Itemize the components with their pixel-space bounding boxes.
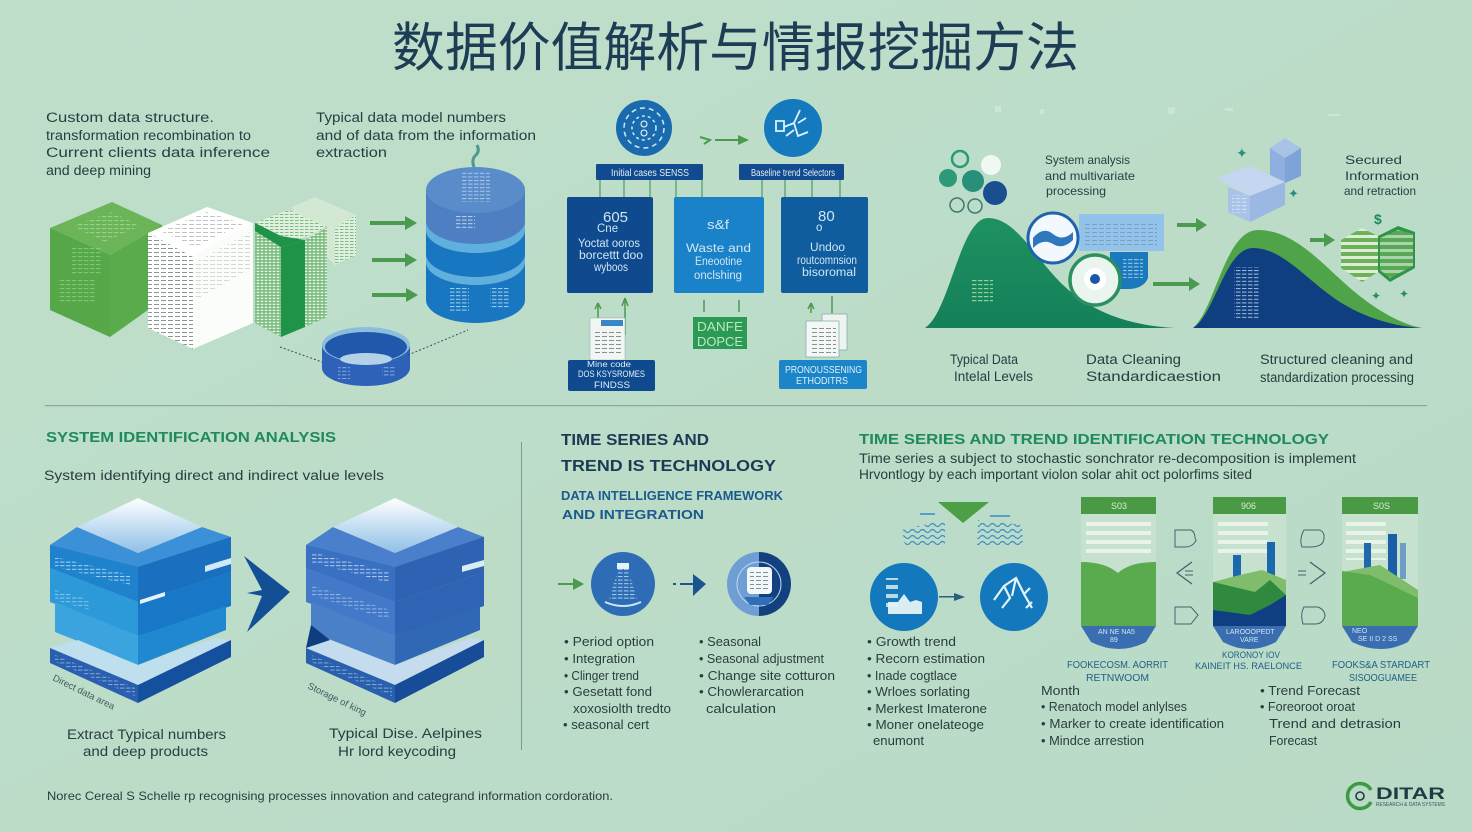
icon: document circle bbox=[727, 552, 791, 616]
text: system analysis: processing bbox=[1046, 184, 1106, 198]
green label: danfe dopce: DANFE bbox=[697, 319, 743, 334]
heading: time series and trend bbox=[561, 432, 784, 522]
box one: Cne bbox=[597, 223, 618, 235]
text block: typical data model numbers: Typical data model numbers bbox=[316, 110, 506, 125]
text block: typical data model numbers bbox=[316, 110, 536, 160]
captions: top right: Standardicaestion bbox=[1086, 369, 1221, 384]
list: growth: enumont bbox=[873, 733, 924, 748]
box two: Waste and bbox=[686, 243, 751, 255]
text: system analysis: System analysis bbox=[1045, 153, 1130, 167]
arrow: small dark bbox=[939, 593, 965, 601]
text block: custom data structure bbox=[46, 110, 270, 178]
card: area chart three: S0S bbox=[1373, 501, 1390, 511]
icon: isometric server: ✦ bbox=[1236, 145, 1248, 161]
box one: borcettt doo bbox=[579, 250, 643, 262]
slanted small labels bbox=[51, 673, 368, 719]
captions: lower left bbox=[67, 726, 482, 759]
white table bbox=[148, 207, 253, 349]
text block: typical data model numbers: and of data from the information bbox=[316, 128, 536, 143]
text: structured information: Information bbox=[1345, 169, 1419, 183]
heading: time series and trend: AND INTEGRATION bbox=[562, 507, 704, 522]
logo: RESEARCH & DATA SYSTEMS bbox=[1376, 802, 1445, 808]
text block: custom data structure: and deep mining bbox=[46, 163, 151, 178]
card labels: FOOKS&A STARDART bbox=[1332, 660, 1430, 671]
list: trend forecast: Forecast bbox=[1269, 733, 1317, 748]
list: middle column two bbox=[699, 634, 835, 716]
captions: top right: Intelal Levels bbox=[954, 369, 1033, 384]
arrows: right section bbox=[1153, 218, 1335, 291]
heading: time series trend technology: TIME SERIES AND TREND IDENTIFICATION TECHNOLOGY bbox=[859, 431, 1329, 448]
icon: dish bbox=[322, 327, 410, 386]
list: middle column two: • Seasonal adjustment bbox=[699, 651, 824, 666]
pale back table bbox=[292, 197, 356, 265]
text block: typical data model numbers: extraction bbox=[316, 145, 387, 160]
green label: danfe dopce bbox=[693, 317, 747, 349]
captions: top right: standardization processing bbox=[1260, 370, 1414, 385]
list: month: • Marker to create identification bbox=[1041, 716, 1224, 731]
heading: time series and trend: DATA INTELLIGENCE FRAMEWORK bbox=[561, 488, 784, 503]
divider: horizontal bbox=[45, 405, 1427, 406]
captions: lower left: Extract Typical numbers bbox=[67, 727, 226, 742]
description text: Time series a subject to stochastic sonchrator re-decomposition is implement bbox=[859, 451, 1356, 466]
captions: top right: Data Cleaning bbox=[1086, 352, 1181, 367]
list: trend forecast: Trend and detrasion bbox=[1269, 716, 1401, 731]
illustration: stacked layers one bbox=[50, 498, 231, 703]
icon: document one bbox=[590, 318, 625, 360]
card labels bbox=[1067, 650, 1430, 684]
list: growth: • Growth trend bbox=[867, 634, 956, 649]
divider: vertical bbox=[521, 442, 522, 750]
text: structured information bbox=[1344, 153, 1419, 198]
text block: custom data structure: Current clients data inference bbox=[46, 145, 270, 160]
logo: DITAR bbox=[1376, 784, 1445, 803]
box two: Eneootine bbox=[695, 256, 742, 268]
panel: blue data callouts bbox=[1028, 213, 1164, 305]
card: area chart two: VARE bbox=[1240, 637, 1259, 644]
green cube bbox=[50, 202, 162, 337]
label: bottom left: FINDSS bbox=[594, 380, 630, 390]
card: area chart two: LAROOOPEDT bbox=[1226, 629, 1275, 636]
logo bbox=[1348, 783, 1445, 808]
box one: 605 bbox=[603, 209, 628, 226]
captions: lower left: Typical Dise. Aelpines bbox=[329, 726, 482, 741]
icon: network circle bbox=[980, 563, 1048, 631]
list: middle column one: • seasonal cert bbox=[563, 717, 649, 732]
icon: tower circle bbox=[591, 552, 655, 616]
green label: danfe dopce: DOPCE bbox=[697, 334, 743, 349]
heading: system identification: SYSTEM IDENTIFICATION ANALYSIS bbox=[46, 430, 336, 446]
arrow: green to ship icon bbox=[558, 578, 584, 590]
text: system analysis bbox=[1045, 153, 1135, 198]
list: growth bbox=[867, 634, 987, 748]
box one: Yoctat ooros bbox=[578, 238, 640, 250]
captions: top right bbox=[950, 352, 1414, 385]
arrow: between circles bbox=[700, 135, 749, 145]
list: middle column two: • Change site cotturon bbox=[699, 668, 835, 683]
card labels: KORONOY IOV bbox=[1222, 650, 1280, 660]
flow diagram bbox=[567, 99, 868, 391]
box three: bisoromal bbox=[802, 267, 856, 279]
label: bottom left: DOS KSYSROMES bbox=[578, 369, 645, 379]
footer note: Norec Cereal S Schelle rp recognising processes innovation and categrand information cordoration. bbox=[47, 789, 613, 803]
description text: Hrvontlogy by each important violon solar ahit oct polorfims sited bbox=[859, 467, 1252, 482]
slanted small labels: Storage of king bbox=[306, 681, 368, 719]
box three: 80 bbox=[818, 208, 835, 225]
list: growth: • Moner onelateoge bbox=[867, 717, 984, 732]
box two: onclshing bbox=[694, 270, 742, 282]
list: middle column one: • Gesetatt fond bbox=[564, 684, 652, 699]
label bar two: Baseline trend Selectors bbox=[751, 168, 835, 179]
card labels: SISOOGUAMEE bbox=[1349, 673, 1417, 684]
list: middle column one: • Integration bbox=[564, 651, 635, 666]
icon: green stacked server: ✦ bbox=[1399, 287, 1409, 301]
connector ticks bbox=[600, 180, 840, 197]
illustration: data blocks bbox=[50, 197, 356, 349]
icon: green stacked server bbox=[1341, 211, 1415, 303]
list: middle column one: • Period option bbox=[564, 634, 654, 649]
card labels: KAINEIT HS. RAELONCE bbox=[1195, 661, 1302, 672]
text: system analysis: and multivariate bbox=[1045, 169, 1135, 183]
faint marks at top right bbox=[995, 106, 1340, 116]
card: area chart three bbox=[1342, 497, 1418, 649]
list: middle column two: • Chowlerarcation bbox=[699, 684, 804, 699]
text block: custom data structure: transformation recombination to bbox=[46, 128, 251, 143]
card: area chart one: AN NE NA5 bbox=[1098, 629, 1135, 636]
list: middle column two: calculation bbox=[706, 701, 776, 716]
text block: custom data structure: Custom data structure. bbox=[46, 110, 214, 125]
box three: o bbox=[816, 222, 822, 234]
list: growth: • Wrloes sorlating bbox=[867, 684, 970, 699]
box three: Undoo bbox=[810, 242, 845, 254]
description text bbox=[859, 451, 1356, 482]
list: trend forecast bbox=[1260, 683, 1401, 748]
icon: database cylinder bbox=[426, 145, 525, 323]
heading: time series and trend: TIME SERIES AND bbox=[561, 432, 709, 449]
heading: time series and trend: TREND IS TECHNOLOGY bbox=[561, 458, 776, 475]
list: middle column one: xoxosiolth tredto bbox=[573, 701, 671, 716]
list: month: • Mindce arrestion bbox=[1041, 733, 1144, 748]
slanted small labels: Direct data area bbox=[51, 673, 117, 713]
green table bbox=[255, 210, 327, 337]
list: middle column one: • Clinger trend bbox=[564, 668, 639, 683]
list: middle column two: • Seasonal bbox=[699, 634, 761, 649]
card: area chart two bbox=[1213, 497, 1286, 649]
label: bottom right bbox=[779, 360, 867, 389]
list: growth: • Merkest Imaterone bbox=[867, 701, 987, 716]
label bar one: Initial cases SENSS bbox=[611, 168, 689, 179]
card labels: RETNWOOM bbox=[1086, 673, 1149, 684]
icon cluster: bubbles bbox=[939, 151, 1007, 213]
list: middle column one bbox=[563, 634, 671, 732]
label: bottom left: Mine code bbox=[587, 360, 632, 369]
card: area chart two: 906 bbox=[1241, 501, 1256, 511]
icon: green stacked server: $ bbox=[1374, 211, 1382, 227]
list: month: • Renatoch model anlylses bbox=[1041, 699, 1187, 714]
list: month bbox=[1041, 683, 1224, 748]
label: bottom left bbox=[568, 360, 655, 391]
box two bbox=[674, 197, 764, 293]
illustration: stacked layers two bbox=[306, 498, 484, 703]
box one: wyboos bbox=[593, 262, 628, 274]
list: trend forecast: • Trend Forecast bbox=[1260, 683, 1360, 698]
icon: growth circle bbox=[870, 563, 938, 631]
arrows: into database bbox=[370, 216, 418, 302]
title: 数据价值解析与情报挖掘方法 bbox=[392, 19, 1079, 78]
card labels: FOOKECOSM. AORRIT bbox=[1067, 660, 1168, 671]
icon: green stacked server: ✦ bbox=[1371, 289, 1381, 303]
captions: lower left: and deep products bbox=[83, 744, 208, 759]
card: area chart one: 89 bbox=[1110, 637, 1118, 644]
icon: triangle with wave maps bbox=[902, 502, 1023, 545]
list: month: Month bbox=[1041, 683, 1080, 698]
card: area chart one: S03 bbox=[1111, 501, 1127, 511]
icon: circle network one bbox=[616, 100, 672, 156]
icon: isometric server: ✦ bbox=[1288, 186, 1299, 201]
icon: isometric server bbox=[1216, 138, 1301, 222]
subheading: system identifying: System identifying direct and indirect value levels bbox=[44, 468, 384, 483]
icon: document two bbox=[806, 314, 847, 357]
captions: top right: Typical Data bbox=[950, 352, 1018, 367]
dotted connector lines bbox=[280, 330, 468, 362]
box one bbox=[567, 197, 653, 293]
box two: s&f bbox=[707, 217, 729, 232]
icon: circle network two bbox=[764, 99, 822, 157]
list: growth: • Recorn estimation bbox=[867, 651, 985, 666]
arrows: lower connectors bbox=[595, 296, 832, 335]
text: structured information: Secured bbox=[1345, 153, 1402, 167]
card: area chart three: NEO bbox=[1352, 628, 1368, 635]
card: area chart one bbox=[1081, 497, 1156, 649]
box three: routcomnsion bbox=[797, 255, 857, 267]
arrow: navy bbox=[673, 574, 706, 596]
label bar two bbox=[739, 164, 844, 180]
chart: navy mountain bbox=[1193, 230, 1422, 328]
label: bottom right: ETHODITRS bbox=[796, 376, 848, 387]
label: bottom right: PRONOUSSENING bbox=[785, 365, 862, 376]
card: area chart three: SE II D 2 SS bbox=[1358, 636, 1398, 643]
icon: chevron arrow bbox=[244, 556, 290, 632]
icons: connector bubbles and chevrons bbox=[1175, 530, 1325, 624]
captions: lower left: Hr lord keycoding bbox=[338, 744, 456, 759]
label bar one bbox=[596, 164, 703, 180]
list: growth: • Inade cogtlace bbox=[867, 668, 957, 683]
chart: green mountain bbox=[925, 218, 1175, 328]
box three bbox=[781, 197, 868, 293]
captions: top right: Structured cleaning and bbox=[1260, 352, 1413, 367]
text: structured information: and retraction bbox=[1344, 184, 1416, 198]
list: trend forecast: • Foreoroot oroat bbox=[1260, 699, 1355, 714]
